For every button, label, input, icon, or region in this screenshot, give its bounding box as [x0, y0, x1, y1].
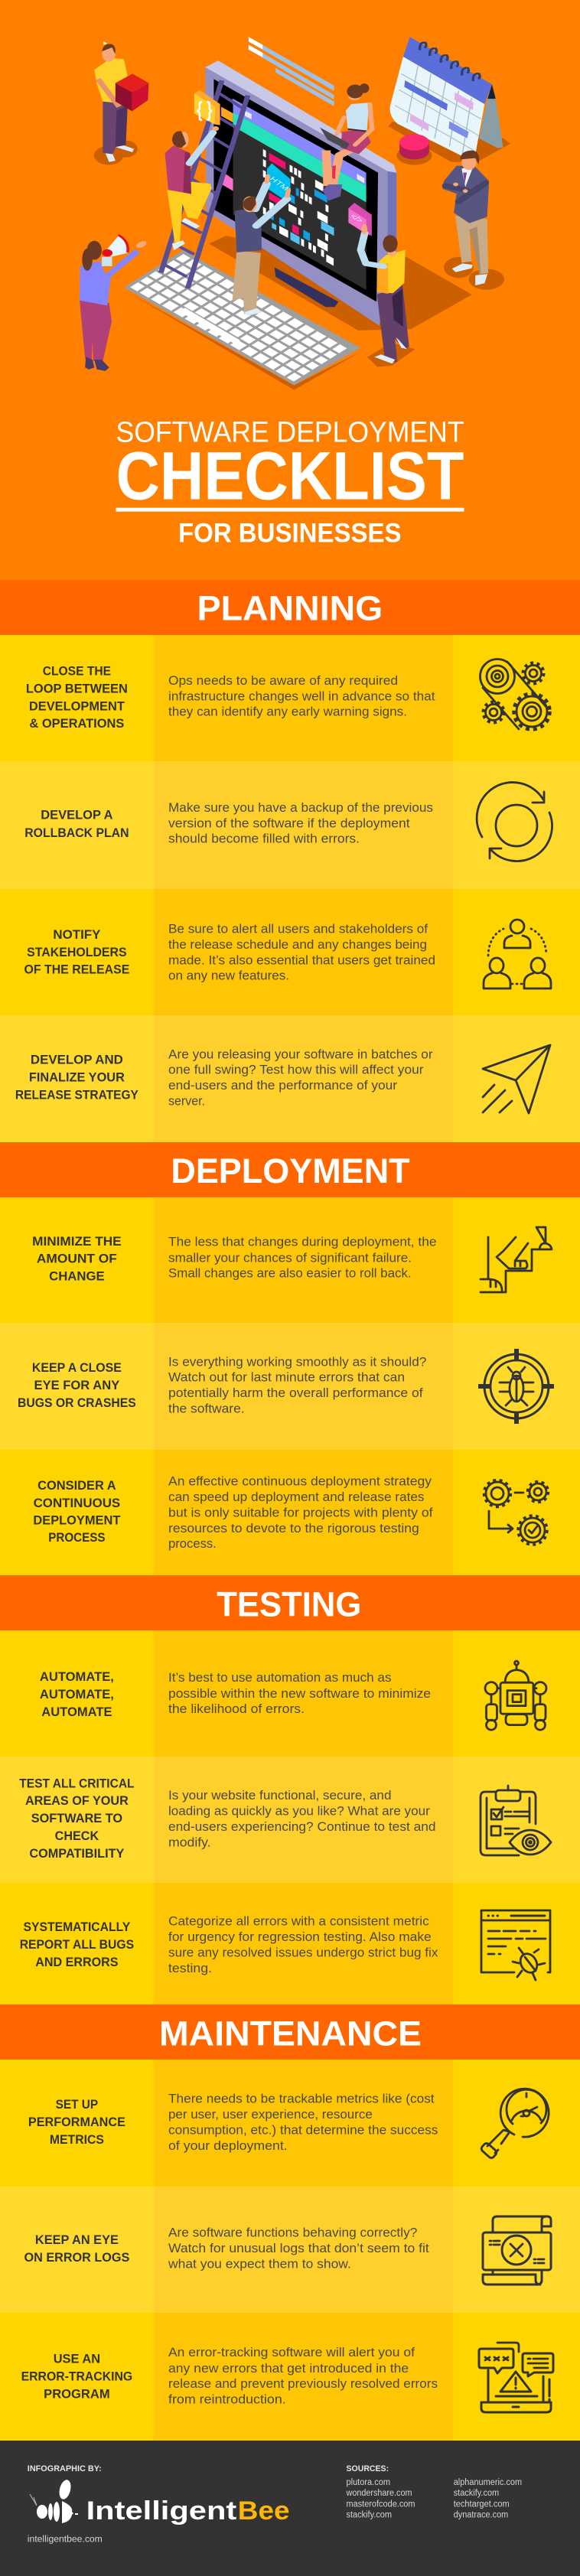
monitor: [205, 60, 396, 326]
sources column 1: plutora.com: [346, 2478, 390, 2487]
row: rollback plan: [0, 761, 580, 889]
row heading: KEEP A CLOSE: [32, 1360, 122, 1375]
row heading: KEEP AN EYE: [35, 2232, 119, 2247]
sources column 1: masterofcode.com: [346, 2499, 415, 2509]
row heading: [32, 1234, 122, 1284]
row description: [168, 1914, 438, 1975]
row description: the software.: [168, 1401, 245, 1415]
person touching screen: [233, 176, 288, 316]
keyboard: [124, 250, 360, 385]
row description: [168, 2345, 438, 2407]
section band: [0, 2004, 580, 2060]
row heading: STAKEHOLDERS: [27, 945, 127, 959]
row description: per user, user experience, resource: [168, 2107, 373, 2122]
section: testing: [0, 1575, 580, 2004]
sources heading: SOURCES:: [346, 2464, 389, 2473]
row heading: CHECK: [55, 1829, 99, 1843]
row description: process.: [168, 1536, 217, 1551]
row description: Categorize all errors with a consistent metric: [168, 1914, 429, 1929]
row description: [168, 2225, 429, 2271]
row heading: DEVELOP AND: [31, 1053, 123, 1067]
icon: HTML tile: [267, 164, 295, 200]
row heading: PERFORMANCE: [28, 2115, 125, 2129]
row heading: CLOSE THE: [43, 664, 111, 679]
floating code lines: [249, 37, 334, 106]
row heading: SOFTWARE TO: [31, 1811, 122, 1825]
row heading: OF THE RELEASE: [24, 962, 129, 977]
footer: [0, 2441, 580, 2576]
row description: Ops needs to be aware of any required: [168, 673, 398, 688]
ladder: [161, 80, 248, 288]
person with red cube: [94, 41, 148, 162]
row description: Small changes are also easier to roll back.: [168, 1266, 412, 1281]
row heading: [28, 2097, 125, 2147]
row heading: CONTINUOUS: [34, 1496, 120, 1510]
row description: [168, 673, 435, 719]
section band: [0, 580, 580, 635]
row: report bugs: [0, 1883, 580, 2004]
row heading: DEVELOP A: [41, 808, 113, 822]
row description: version of the software if the deployment: [168, 816, 410, 830]
row heading: ERROR-TRACKING: [21, 2369, 132, 2383]
title block: [116, 415, 464, 548]
section band: DEPLOYMENT: [171, 1151, 410, 1190]
sources column 1: wondershare.com: [346, 2489, 412, 2498]
row description: modify.: [168, 1835, 211, 1850]
title rule: [116, 508, 464, 512]
sources column 2: [454, 2478, 522, 2519]
row description: infrastructure changes well in advance so that: [168, 689, 435, 703]
row heading: BUGS OR CRASHES: [18, 1395, 136, 1410]
row heading: LOOP BETWEEN: [26, 681, 128, 696]
row heading: FINALIZE YOUR: [29, 1070, 125, 1085]
row: error logs: [0, 2187, 580, 2313]
row heading: NOTIFY: [53, 927, 100, 942]
row heading: [19, 1776, 135, 1861]
row: error tracking: [0, 2313, 580, 2441]
sources column 1: stackify.com: [346, 2510, 392, 2519]
icon: code tag tile: </>: [348, 213, 364, 224]
row description: consumption, etc.) that determine the success: [168, 2122, 438, 2137]
footer: Bee: [238, 2496, 289, 2526]
row description: loading as quickly as you like? What are your: [168, 1804, 430, 1819]
sources column 2: stackify.com: [454, 2489, 499, 2498]
row heading: REPORT ALL BUGS: [20, 1937, 134, 1952]
row heading: [21, 2351, 132, 2401]
row description: [168, 2091, 438, 2153]
icon: error log scroll: [483, 2216, 551, 2285]
row description: [168, 1354, 426, 1415]
person right front in yellow: [360, 224, 409, 363]
row heading: SET UP: [56, 2097, 98, 2112]
row heading: CONSIDER A: [37, 1478, 116, 1493]
row description: server.: [168, 1093, 205, 1108]
row description: Is everything working smoothly as it should?: [168, 1354, 426, 1369]
title line 1: SOFTWARE DEPLOYMENT: [116, 415, 464, 448]
icon: stakeholder network: [484, 920, 551, 988]
section: planning: [0, 580, 580, 1142]
row description: [168, 1788, 436, 1850]
row description: resources to devote to the rigorous testing: [168, 1521, 419, 1536]
row description: potentially harm the overall performance of: [168, 1386, 423, 1400]
row description: any new errors that get introduced in the: [168, 2361, 409, 2376]
wall calendar: [390, 37, 503, 161]
row description: An error-tracking software will alert you of: [168, 2345, 415, 2359]
row heading: COMPATIBILITY: [29, 1846, 124, 1861]
row description: they can identify any early warning signs.: [168, 705, 407, 719]
row heading: ROLLBACK PLAN: [24, 826, 129, 840]
row description: from reintroduction.: [168, 2392, 286, 2407]
row heading: METRICS: [50, 2132, 104, 2147]
row heading: AUTOMATE: [41, 1705, 112, 1719]
row description: Is your website functional, secure, and: [168, 1788, 392, 1803]
person climbing ladder: [165, 126, 219, 250]
row description: Watch for unusual logs that don’t seem to fit: [168, 2241, 429, 2255]
row: notify stakeholders: [0, 889, 580, 1015]
row: minimize change: [0, 1197, 580, 1323]
icon: HTML tile: HTML: [268, 176, 295, 195]
icon: refresh cycle: [477, 783, 552, 861]
row description: sure any resolved issues undergo strict bug fix: [168, 1946, 438, 1960]
row heading: & OPERATIONS: [29, 716, 124, 731]
row description: end-users and the performance of your: [168, 1078, 397, 1093]
row description: but is only suitable for projects with plenty of: [168, 1506, 433, 1519]
row description: There needs to be trackable metrics like (cost: [168, 2091, 435, 2105]
row description: the release schedule and any changes being: [168, 937, 427, 952]
row heading: AUTOMATE,: [40, 1669, 114, 1684]
row heading: AREAS OF YOUR: [25, 1793, 129, 1808]
row description: Be sure to alert all users and stakeholders of: [168, 921, 428, 936]
icon: laptop alert: [479, 2343, 553, 2412]
row heading: [40, 1669, 114, 1719]
row description: [168, 800, 433, 846]
subtitle: FOR BUSINESSES: [178, 517, 401, 548]
row: continuous deployment: [0, 1450, 580, 1575]
row description: Are software functions behaving correctly?: [168, 2225, 417, 2239]
row description: on any new features.: [168, 969, 289, 983]
row: automate: [0, 1630, 580, 1757]
row description: the likelihood of errors.: [168, 1702, 305, 1716]
row heading: CHANGE: [49, 1269, 105, 1284]
row description: possible within the new software to minimize: [168, 1686, 431, 1701]
row: critical areas: [0, 1757, 580, 1883]
row description: should become filled with errors.: [168, 832, 360, 846]
icon: browser with bug: [481, 1910, 550, 1980]
row heading: ON ERROR LOGS: [24, 2250, 129, 2265]
row heading: AND ERRORS: [35, 1955, 119, 1969]
row: performance metrics: [0, 2060, 580, 2187]
pink cylinder: [399, 134, 429, 159]
row description: of your deployment.: [168, 2138, 288, 2153]
row description: [168, 1474, 433, 1551]
website: intelligentbee.com: [28, 2535, 103, 2545]
section: deployment: [0, 1142, 580, 1575]
icon: paper plane: [483, 1045, 550, 1113]
title line 2: CHECKLIST: [116, 438, 464, 514]
row heading: [24, 808, 129, 840]
row heading: SYSTEMATICALLY: [24, 1920, 130, 1934]
icon: code tag tile: [348, 203, 372, 236]
icon: stairs with flag: [481, 1227, 552, 1292]
row heading: EYE FOR ANY: [34, 1378, 119, 1392]
row description: Make sure you have a backup of the previous: [168, 800, 433, 815]
sources column 2: dynatrace.com: [454, 2510, 508, 2519]
row: release strategy: [0, 1015, 580, 1142]
section: maintenance: [0, 2004, 580, 2441]
row heading: MINIMIZE THE: [32, 1234, 122, 1249]
row heading: DEVELOPMENT: [29, 699, 125, 713]
icon: robot: [485, 1661, 546, 1730]
row description: It’s best to use automation as much as: [168, 1670, 392, 1685]
section band: [0, 1575, 580, 1630]
hero illustration: team building software on a giant monitor: [80, 37, 510, 390]
row heading: AMOUNT OF: [37, 1252, 117, 1266]
sources column 1: [346, 2478, 415, 2519]
row description: smaller your chances of significant failure.: [168, 1250, 412, 1265]
row heading: [24, 927, 129, 977]
ground shadows: [94, 122, 510, 390]
section band: TESTING: [217, 1585, 361, 1624]
section band: [0, 1142, 580, 1197]
icon: gauge magnifier: [481, 2089, 549, 2159]
row description: [168, 1235, 436, 1281]
row description: release and prevent previously resolved errors: [168, 2376, 438, 2391]
row heading: RELEASE STRATEGY: [15, 1088, 138, 1102]
row description: [168, 921, 435, 983]
row heading: [20, 1920, 134, 1969]
row description: The less that changes during deployment, the: [168, 1235, 436, 1249]
credit label: INFOGRAPHIC BY:: [28, 2464, 102, 2473]
row heading: [24, 2232, 129, 2265]
sources column 2: alphanumeric.com: [454, 2478, 522, 2487]
icon: gears to check: [484, 1480, 548, 1545]
row description: [168, 1047, 433, 1108]
row heading: [33, 1478, 120, 1545]
header background: [0, 0, 580, 580]
row heading: [18, 1360, 136, 1410]
row heading: AUTOMATE,: [40, 1687, 114, 1702]
logo: bee mark: [30, 2479, 78, 2523]
sources column 2: techtarget.com: [454, 2499, 510, 2509]
section band: PLANNING: [197, 589, 383, 628]
row description: Watch out for last minute errors that can: [168, 1370, 405, 1385]
row description: testing.: [168, 1961, 212, 1975]
row description: end-users experiencing? Continue to test and: [168, 1819, 436, 1834]
row: close the loop: [0, 635, 580, 761]
icon: bug in crosshair: [478, 1349, 554, 1424]
row description: Are you releasing your software in batches or: [168, 1047, 433, 1061]
row heading: [26, 664, 128, 731]
icon: curly braces tile: [194, 90, 220, 125]
section band: MAINTENANCE: [159, 2014, 422, 2053]
row heading: TEST ALL CRITICAL: [19, 1776, 135, 1790]
row heading: PROCESS: [48, 1530, 106, 1545]
row description: An effective continuous deployment strategy: [168, 1474, 432, 1488]
row heading: DEPLOYMENT: [33, 1513, 120, 1527]
row description: for urgency for regression testing. Also make: [168, 1930, 432, 1944]
icon: curly braces tile: { }: [197, 98, 212, 122]
icon: belt and gears: [481, 659, 549, 730]
row description: made. It’s also essential that users get trained: [168, 953, 435, 967]
woman with megaphone: [80, 235, 148, 371]
man in suit with crossed arms: [442, 151, 489, 285]
row description: [168, 1670, 431, 1716]
row heading: USE AN: [54, 2351, 100, 2366]
row description: can speed up deployment and release rates: [168, 1490, 424, 1504]
icon: clipboard with eye: [481, 1786, 551, 1855]
row description: one full swing? Test how this will affect your: [168, 1063, 424, 1077]
row: watch for bugs: [0, 1323, 580, 1450]
row heading: [15, 1053, 138, 1102]
row description: what you expect them to show.: [168, 2256, 351, 2271]
woman sitting on monitor with laptop: [320, 83, 372, 200]
logo wordmark: Intelligent: [86, 2496, 236, 2526]
row heading: PROGRAM: [44, 2386, 110, 2401]
